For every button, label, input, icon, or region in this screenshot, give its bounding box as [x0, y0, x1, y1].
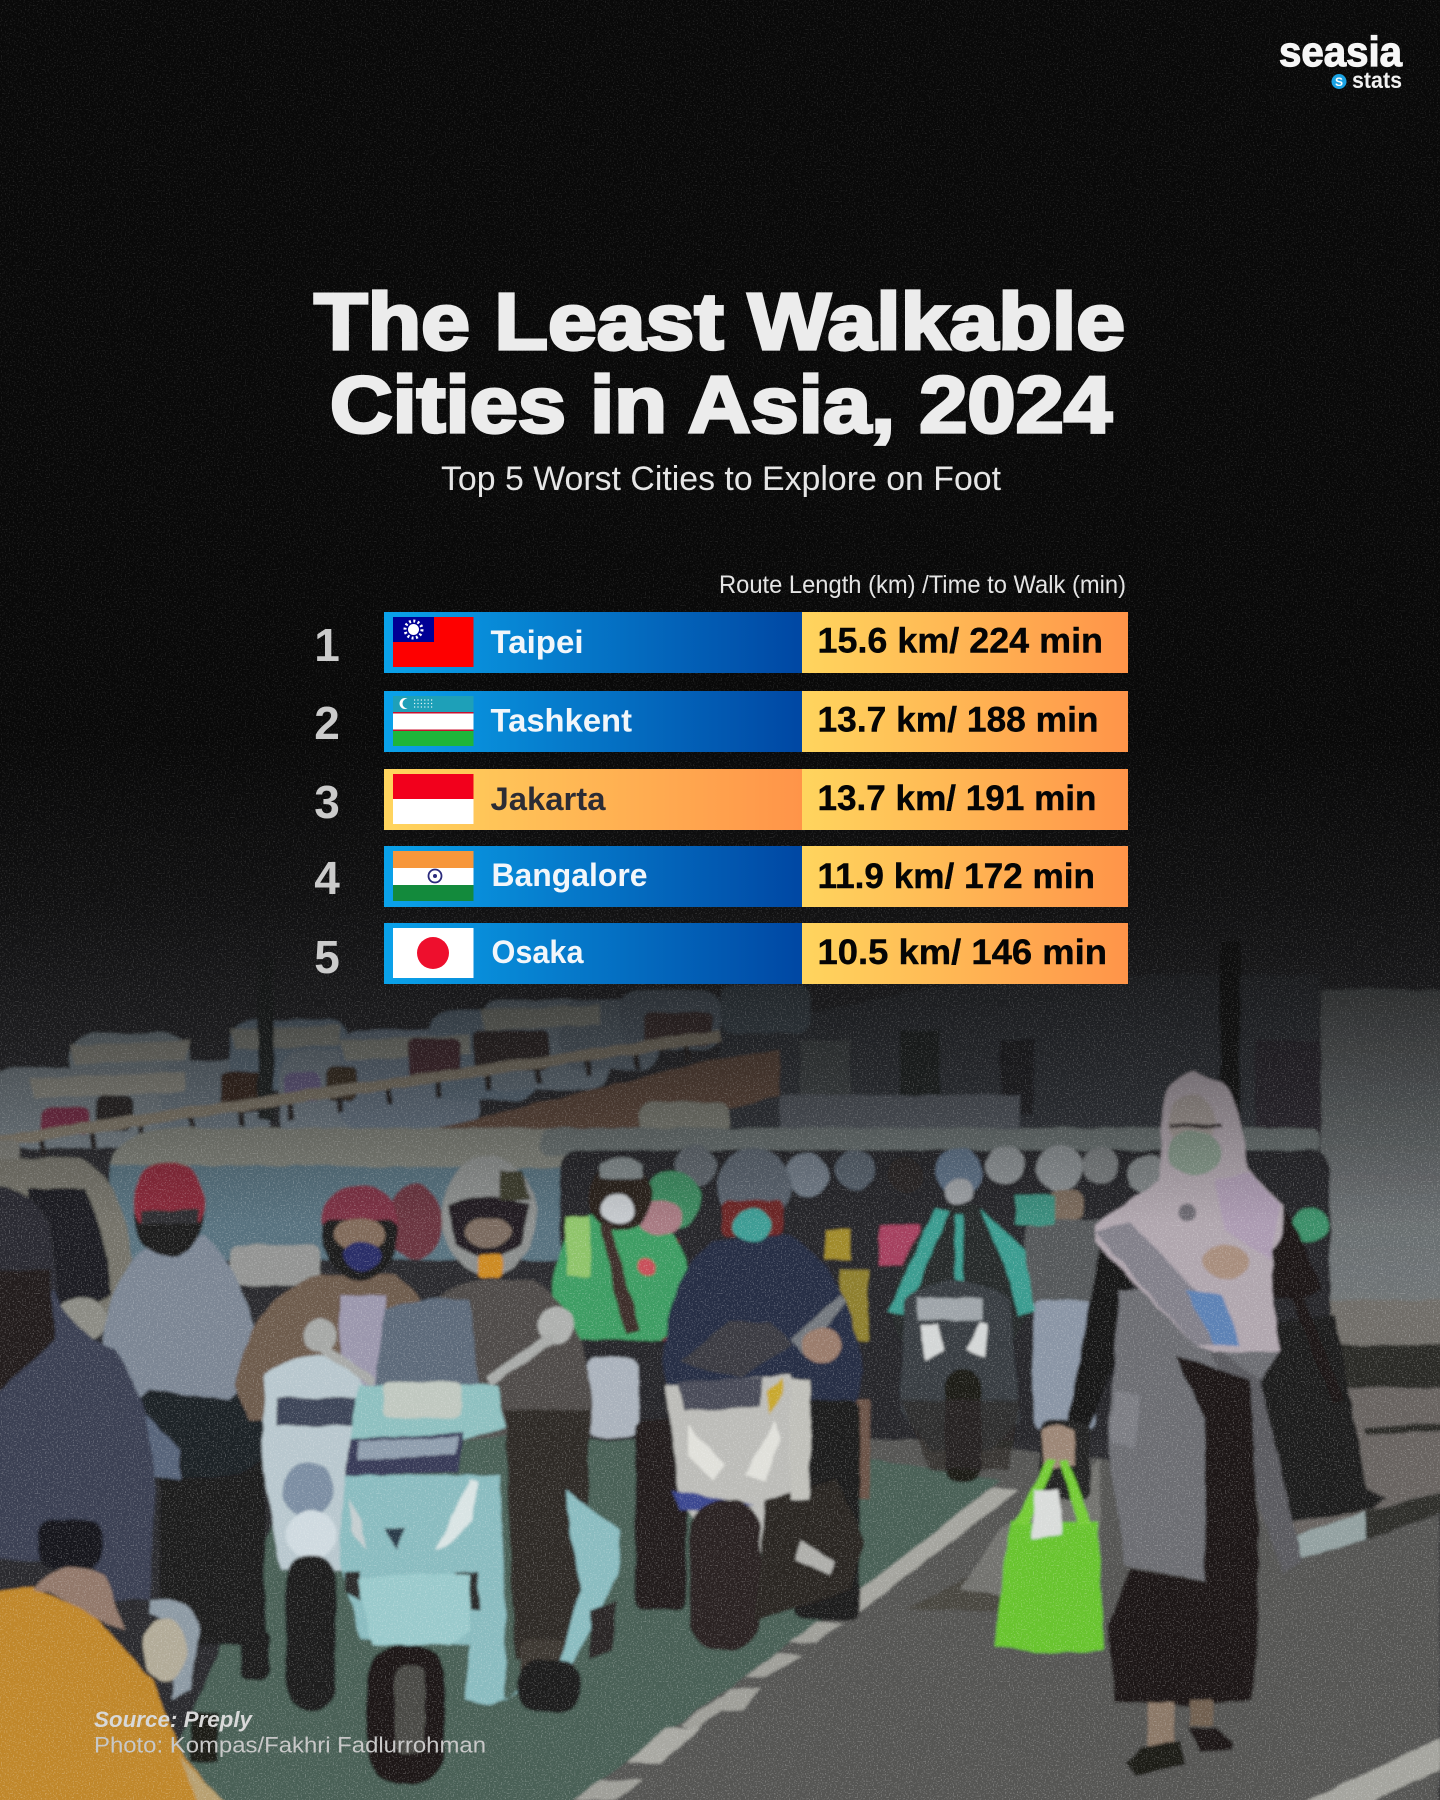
right wall and sidewalk — [1260, 990, 1440, 1560]
background traffic crowd — [540, 1128, 1330, 1500]
row 5: Osaka: Osaka — [492, 934, 584, 970]
row 1: Taipei: 1 — [314, 619, 340, 671]
flag: Indonesia — [393, 774, 474, 824]
title: The Least Walkable — [314, 277, 1125, 366]
logo: seasia stats: seasia — [1279, 28, 1403, 75]
logo: seasia stats: S — [1335, 75, 1343, 89]
source credit — [94, 1707, 486, 1758]
hand, legs and shoes — [1042, 1425, 1076, 1470]
source credit: Photo: Kompas/Fakhri Fadlurrohman — [94, 1732, 486, 1758]
logo: seasia stats: stats — [1352, 67, 1402, 93]
flag: Uzbekistan — [393, 696, 474, 746]
rider at left edge in dark jacket — [0, 1185, 200, 1700]
rider: red helmet in grey hoodie — [100, 1162, 322, 1680]
row 5: Osaka: 10.5 km/ 146 min — [818, 933, 1107, 972]
rider: navy jacket with teal mask and white scooter — [635, 1148, 865, 1650]
parked car behind riders — [0, 1128, 600, 1342]
rider: center scooter in light teal — [303, 1156, 620, 1785]
grey dress — [1108, 1280, 1280, 1582]
row 2: Tashkent — [314, 691, 1128, 752]
bridge traffic and railing — [0, 960, 810, 1170]
flag: India — [393, 851, 474, 901]
row 5: Osaka — [314, 923, 1128, 984]
shoulder bag — [1258, 1315, 1386, 1525]
title: Cities in Asia, 2024 — [330, 360, 1113, 449]
dark sleeves — [1068, 1245, 1132, 1425]
row 1: Taipei — [314, 612, 1128, 673]
row 3: Jakarta: Jakarta — [490, 781, 606, 817]
subtitle: Top 5 Worst Cities to Explore on Foot — [441, 460, 1002, 498]
photo: commuters and pedestrian on a congested road — [0, 700, 1440, 1800]
row 1: Taipei: Taipei — [490, 624, 584, 660]
road surface, green lane and lane markings — [150, 1380, 1440, 1800]
row 3: Jakarta: 3 — [314, 776, 340, 828]
dark trousers — [1108, 1355, 1259, 1706]
title — [314, 277, 1125, 449]
pedestrian woman in headscarf — [1042, 1072, 1386, 1776]
ranking table — [314, 612, 1128, 984]
row 2: Tashkent: 2 — [314, 697, 340, 749]
row 4: Bangalore: 4 — [314, 852, 340, 904]
flag: Taiwan — [393, 617, 474, 667]
row 3: Jakarta: 13.7 km/ 191 min — [818, 779, 1096, 818]
rider: green jacket with white mask — [553, 1158, 701, 1340]
column header: Route Length (km) /Time to Walk (min) — [719, 571, 1126, 599]
foreground orange jacket — [0, 1568, 232, 1800]
row 3: Jakarta — [314, 769, 1128, 830]
scarf — [1095, 1072, 1283, 1352]
row 1: Taipei: 15.6 km/ 224 min — [818, 622, 1103, 660]
row 5: Osaka: 5 — [314, 931, 340, 983]
row 2: Tashkent: 13.7 km/ 188 min — [818, 700, 1098, 740]
source credit: Source: Preply — [94, 1707, 254, 1732]
row 2: Tashkent: Tashkent — [490, 702, 632, 738]
row 4: Bangalore — [314, 846, 1128, 907]
green shopping bag — [994, 1460, 1104, 1654]
rider: teal sleeved jacket with grey scooter — [888, 1148, 1035, 1483]
street backdrop with trees and under-bridge shade — [0, 700, 1440, 1800]
rider: maroon helmet in brown jacket with white scooter — [235, 1184, 443, 1710]
row 4: Bangalore: Bangalore — [492, 857, 648, 893]
row 4: Bangalore: 11.9 km/ 172 min — [818, 857, 1095, 896]
flag: Japan — [393, 928, 474, 978]
